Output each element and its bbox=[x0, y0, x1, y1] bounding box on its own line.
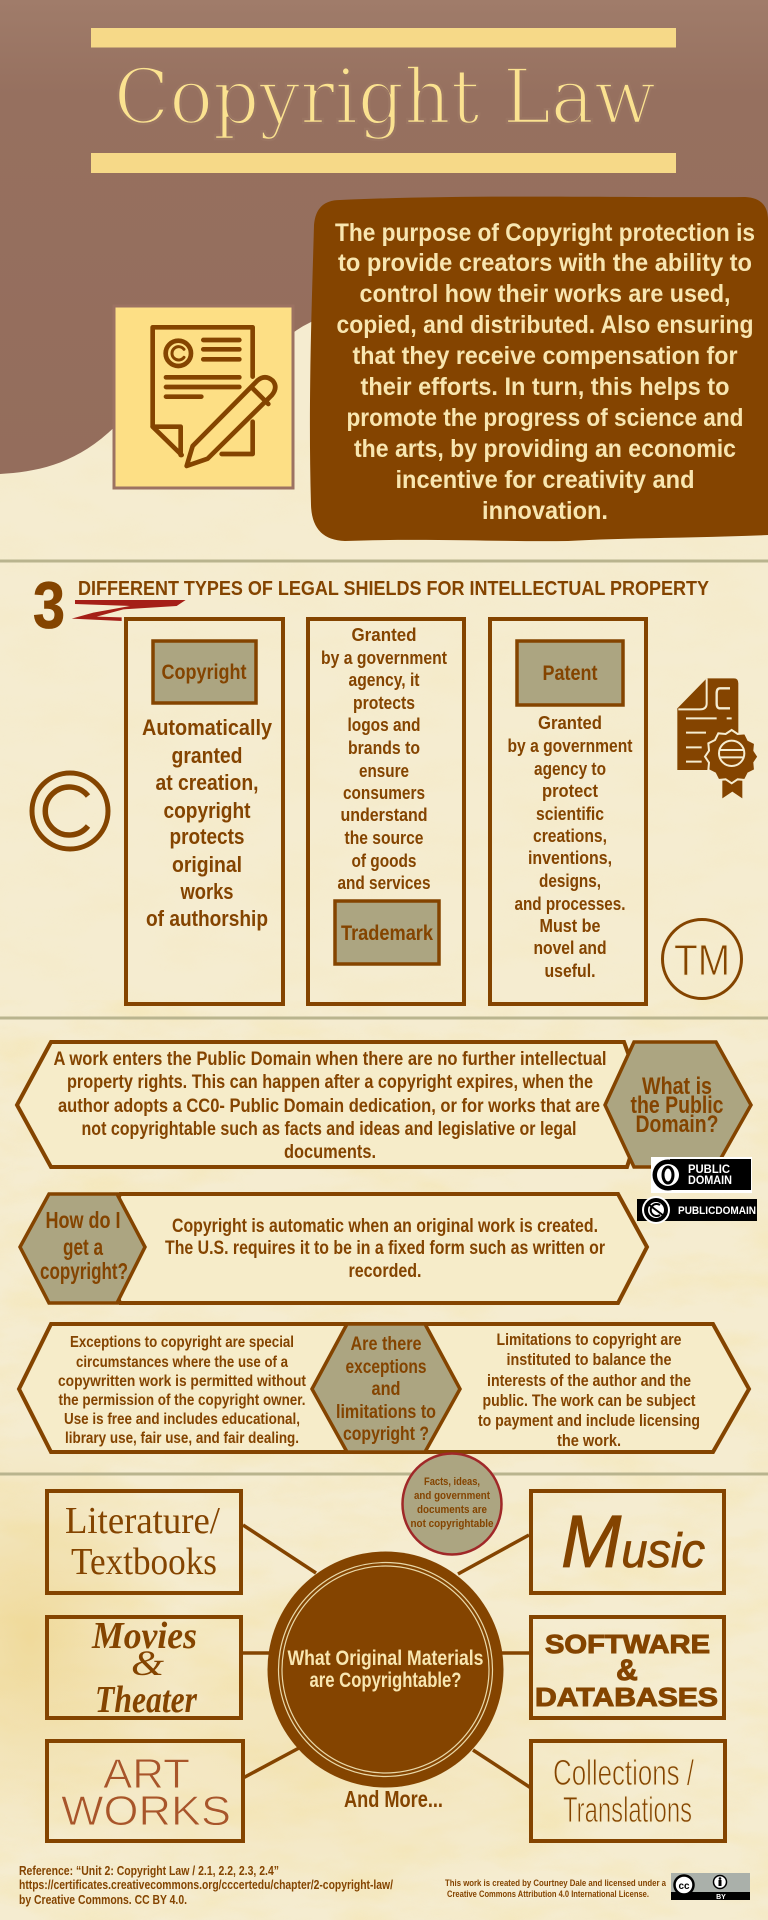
panel: exceptions and limitations bbox=[19, 1324, 749, 1452]
box: collections and translations: Collections / bbox=[553, 1752, 694, 1793]
panel: patent: agency to bbox=[534, 759, 606, 779]
body text: how to get copyright: Copyright is automatic when an original work is created. bbox=[172, 1216, 598, 1237]
text: exceptions: the permission of the copyright owner. bbox=[58, 1392, 306, 1409]
panel: purpose of copyright: innovation. bbox=[482, 497, 608, 525]
panel: patent: by a government bbox=[508, 736, 632, 756]
question hexagon: how do I get a copyright: How do I bbox=[46, 1207, 120, 1233]
title: Copyright Law bbox=[114, 52, 656, 141]
icon: certificate bbox=[677, 678, 758, 798]
panel: copyright: granted bbox=[172, 743, 242, 768]
panel: trademark: understand bbox=[340, 805, 428, 825]
panel: patent bbox=[490, 619, 646, 1004]
text: limitations: Limitations to copyright are bbox=[496, 1330, 682, 1349]
text: exceptions bbox=[58, 1334, 307, 1447]
panel: trademark: ensure bbox=[359, 761, 409, 781]
icon: copyright symbol bbox=[32, 773, 108, 849]
body text: how to get copyright: recorded. bbox=[348, 1261, 422, 1282]
panel: purpose of copyright bbox=[310, 197, 768, 541]
panel: copyright: Automatically bbox=[142, 715, 273, 740]
panel: purpose of copyright: to provide creators with the ability to bbox=[338, 249, 752, 277]
question hexagon: exceptions and limitations: exceptions bbox=[346, 1357, 426, 1378]
text: exceptions: circumstances where the use of a bbox=[76, 1354, 288, 1371]
text: exceptions: Exceptions to copyright are special bbox=[70, 1334, 294, 1351]
body text: public domain: documents. bbox=[284, 1142, 376, 1163]
label: trademark bbox=[335, 901, 439, 964]
label: patent bbox=[517, 641, 623, 705]
panel: patent: Must be bbox=[540, 916, 600, 936]
panel: copyright bbox=[126, 619, 283, 1004]
question hexagon: exceptions and limitations: and bbox=[372, 1379, 400, 1400]
badge: CC BY: BY bbox=[716, 1894, 726, 1901]
question hexagon: what is the public domain bbox=[605, 1042, 751, 1167]
panel: trademark: by a government bbox=[321, 648, 447, 668]
box: software and databases bbox=[531, 1617, 724, 1718]
text: exceptions: copywritten work is permitted without bbox=[58, 1373, 307, 1390]
question hexagon: exceptions and limitations: copyright ? bbox=[343, 1424, 429, 1445]
panel: copyright: at creation, bbox=[156, 770, 258, 795]
panel: trademark: agency, it bbox=[348, 670, 420, 690]
panel: patent: designs, bbox=[539, 871, 601, 891]
panel: patent: protect bbox=[542, 781, 598, 801]
box: software and databases: & bbox=[616, 1654, 638, 1687]
panel: patent: inventions, bbox=[528, 848, 612, 868]
callout: not copyrightable bbox=[402, 1454, 502, 1554]
panel: copyright: of authorship bbox=[146, 906, 268, 931]
box: art works: ART bbox=[103, 1750, 190, 1797]
reference: by Creative Commons. CC BY 4.0. bbox=[19, 1892, 187, 1907]
question hexagon: how do I get a copyright bbox=[20, 1194, 145, 1303]
text: exceptions: Use is free and includes educational, bbox=[64, 1411, 300, 1428]
panel: trademark: consumers bbox=[343, 783, 425, 803]
reference: Reference: “Unit 2: Copyright Law / 2.1, 2.2, 2.3, 2.4” bbox=[19, 1863, 279, 1878]
panel: trademark: logos and bbox=[348, 715, 420, 735]
body text: public domain bbox=[54, 1049, 606, 1163]
panel: patent: and processes. bbox=[514, 894, 626, 914]
text: exceptions: library use, fair use, and fair dealing. bbox=[65, 1430, 299, 1447]
panel: trademark: of goods bbox=[352, 851, 416, 871]
icon: trademark symbol: TM bbox=[674, 936, 730, 985]
panel: trademark bbox=[308, 619, 464, 1004]
question hexagon: what is the public domain: Domain? bbox=[636, 1111, 718, 1138]
box: movies and theater bbox=[47, 1615, 241, 1721]
heading: three legal shields bbox=[33, 568, 710, 642]
panel: copyright: protects bbox=[170, 824, 244, 849]
title band bbox=[91, 28, 676, 173]
reference bbox=[19, 1863, 393, 1907]
body text: public domain: not copyrightable such as facts and ideas and legislative or legal bbox=[82, 1119, 576, 1140]
connector lines bbox=[241, 1525, 531, 1788]
box: literature and textbooks: Literature/ bbox=[65, 1500, 220, 1542]
panel: patent: scientific bbox=[536, 804, 604, 824]
badge: public domain zero: DOMAIN bbox=[688, 1173, 732, 1187]
license note: This work is created by Courtney Dale and licensed under a bbox=[445, 1878, 667, 1889]
text: limitations: public. The work can be subject bbox=[482, 1391, 696, 1410]
reference: https://certificates.creativecommons.org/cccertedu/chapter/2-copyright-law/ bbox=[19, 1877, 393, 1892]
question hexagon: exceptions and limitations bbox=[312, 1324, 460, 1452]
box: collections and translations bbox=[531, 1741, 725, 1841]
box: literature and textbooks: Textbooks bbox=[71, 1541, 217, 1583]
brown background header shape bbox=[0, 0, 768, 474]
panel: trademark: Granted bbox=[352, 625, 416, 645]
central circle: what original materials bbox=[268, 1552, 504, 1788]
question hexagon: what is the public domain: the Public bbox=[630, 1092, 724, 1119]
question hexagon: what is the public domain: What is bbox=[642, 1073, 712, 1100]
panel: how do I get a copyright bbox=[20, 1194, 647, 1303]
box: art works bbox=[47, 1741, 243, 1841]
callout: not copyrightable: and government bbox=[414, 1490, 490, 1502]
panel: copyright: copyright bbox=[164, 798, 251, 823]
box: movies and theater: & bbox=[131, 1643, 164, 1683]
panel: purpose of copyright: control how their works are used, bbox=[360, 280, 730, 308]
body text: public domain: author adopts a CC0- Public Domain dedication, or for works that are bbox=[58, 1096, 600, 1117]
box: art works: WORKS bbox=[61, 1787, 231, 1834]
panel: what is the public domain bbox=[17, 1042, 751, 1167]
central circle: what original materials: are Copyrightable? bbox=[310, 1669, 462, 1692]
heading: three legal shields: 3 bbox=[33, 568, 65, 642]
box: software and databases: DATABASES bbox=[535, 1682, 718, 1712]
box: software and databases: SOFTWARE bbox=[545, 1629, 710, 1659]
text: limitations: the work. bbox=[557, 1431, 621, 1450]
label: patent: Patent bbox=[542, 662, 598, 685]
text: and more: And More... bbox=[344, 1786, 443, 1812]
text: limitations: to payment and include licensing bbox=[478, 1411, 700, 1430]
central circle: what original materials: What Original Materials bbox=[288, 1647, 484, 1670]
badge: public domain zero: PUBLIC bbox=[688, 1162, 730, 1176]
text: limitations: interests of the author and the bbox=[487, 1371, 691, 1390]
callout: not copyrightable: not copyrightable bbox=[410, 1518, 494, 1530]
icon: document with copyright mark and pencil bbox=[114, 306, 293, 488]
callout: not copyrightable: Facts, ideas, bbox=[424, 1476, 480, 1488]
badge: public domain zero bbox=[651, 1157, 752, 1193]
body text: public domain: property rights. This can happen after a copyright expires, when the bbox=[67, 1072, 593, 1093]
box: movies and theater: Movies bbox=[91, 1615, 197, 1657]
label: copyright bbox=[153, 641, 256, 703]
panel: purpose of copyright: their efforts. In turn, this helps to bbox=[360, 373, 730, 401]
text: limitations: instituted to balance the bbox=[506, 1350, 672, 1369]
panel: purpose of copyright: the arts, by providing an economic bbox=[354, 435, 736, 463]
badge: CC BY: cc bbox=[678, 1881, 690, 1892]
label: trademark: Trademark bbox=[341, 922, 433, 945]
panel: copyright: works bbox=[180, 879, 234, 904]
panel: patent: creations, bbox=[533, 826, 607, 846]
box: collections and translations: Translations bbox=[563, 1789, 692, 1830]
panel: purpose of copyright: that they receive compensation for bbox=[352, 342, 738, 370]
question hexagon: exceptions and limitations: limitations to bbox=[336, 1402, 436, 1423]
badge: public domain mark: PUBLICDOMAIN bbox=[678, 1205, 756, 1217]
body text: how to get copyright: The U.S. requires it to be in a fixed form such as written or bbox=[165, 1238, 606, 1259]
panel: copyright: original bbox=[172, 852, 242, 877]
panel: purpose of copyright: incentive for creativity and bbox=[396, 466, 694, 494]
question hexagon: how do I get a copyright: copyright? bbox=[40, 1258, 128, 1284]
question hexagon: how do I get a copyright: get a bbox=[63, 1234, 103, 1260]
panel: trademark: the source bbox=[344, 828, 424, 848]
box: literature and textbooks bbox=[47, 1491, 241, 1593]
label: copyright: Copyright bbox=[162, 661, 247, 684]
box: music bbox=[531, 1491, 724, 1593]
box: music: Music bbox=[561, 1500, 705, 1583]
question hexagon: exceptions and limitations: Are there bbox=[350, 1334, 422, 1355]
badge: public domain mark bbox=[637, 1196, 757, 1224]
license note: Creative Commons Attribution 4.0 International License. bbox=[447, 1889, 649, 1900]
box: movies and theater: Theater bbox=[95, 1679, 198, 1721]
panel: trademark: protects bbox=[353, 693, 415, 713]
panel: patent: novel and bbox=[534, 938, 606, 958]
body text: how to get copyright bbox=[165, 1216, 606, 1282]
panel: trademark: brands to bbox=[348, 738, 420, 758]
heading: three legal shields: DIFFERENT TYPES OF LEGAL SHIELDS FOR INTELLECTUAL PROPERTY bbox=[78, 578, 710, 600]
icon: trademark symbol bbox=[662, 920, 742, 998]
body text: public domain: A work enters the Public Domain when there are no further intellectual bbox=[54, 1049, 606, 1070]
badge: CC BY bbox=[671, 1873, 750, 1901]
license note bbox=[445, 1878, 667, 1900]
panel: trademark: and services bbox=[338, 873, 430, 893]
text: limitations bbox=[478, 1330, 700, 1450]
panel: patent: Granted bbox=[538, 713, 602, 733]
callout: not copyrightable: documents are bbox=[417, 1504, 487, 1516]
panel: patent: useful. bbox=[544, 961, 596, 981]
